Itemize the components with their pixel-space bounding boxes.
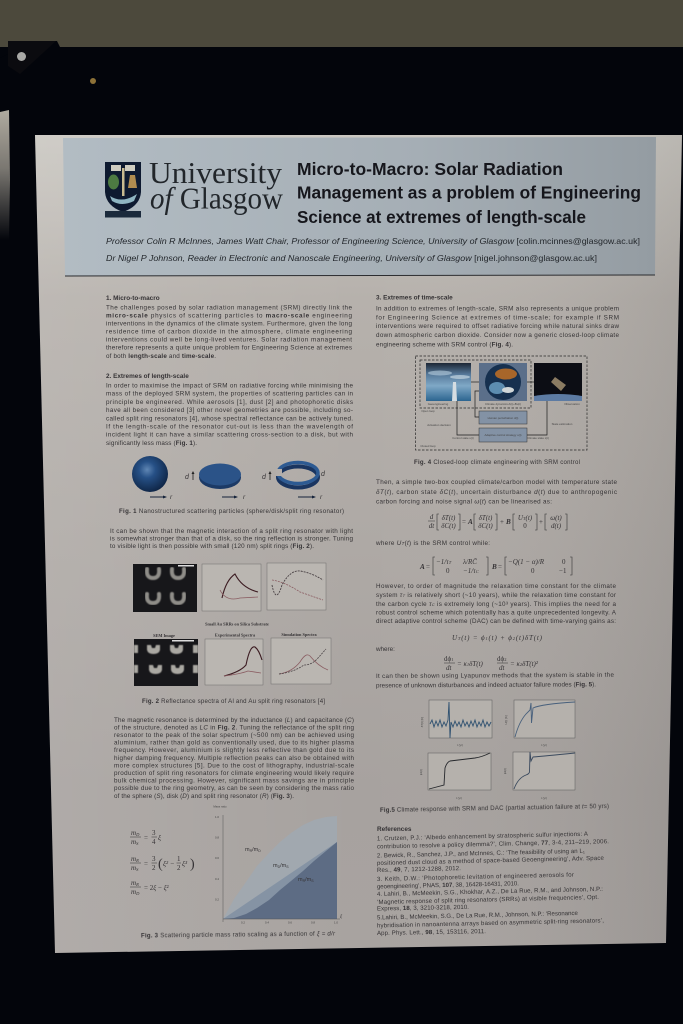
chart column headings: Experimental Spectra	[215, 632, 256, 638]
equation: linear state model: A	[467, 518, 473, 526]
area labels: m	[298, 877, 303, 883]
equation: ring to disk: m	[131, 879, 136, 887]
text: magnetic resonance: resonator to the peak of the solar spectrum (~500 nm) can be achieved using	[114, 732, 354, 739]
chart heading: substrate: Small Au SRRs on Silica Substrate	[205, 622, 269, 626]
equation: ring to sphere: S	[136, 867, 139, 872]
chart: gain two	[503, 752, 575, 800]
references: 2. Bewick, R., Sanchez, J.P., and McInnes, C.: ‘The feasibility of using an L₁	[377, 848, 585, 859]
equation: disk to sphere: m	[131, 838, 136, 846]
text: relaxation time constants: system τT is relatively short (~10 years), while the relaxation time constant for	[376, 592, 616, 599]
area labels: D	[258, 849, 261, 853]
figure 2: reflectance spectra	[133, 563, 331, 686]
equation: gain dynamics: dϕ1	[444, 655, 453, 663]
equation: disk to sphere	[130, 829, 161, 846]
equation: ring to sphere: ξ² −	[163, 860, 175, 868]
equation: ring to sphere: (	[158, 857, 163, 872]
axis ticks: 0.4	[265, 920, 269, 924]
diagram labels: Climate dynamics A(t)+Bu(t)	[485, 402, 521, 406]
references: 3. Keith, D.W.: ‘Photophoretic levitation of engineered aerosols for	[377, 872, 574, 883]
text: magnetic resonance: The magnetic resonance is determined by the inductance (L) and capacitance (C)	[114, 717, 354, 724]
equation: ring to sphere: ξ³	[182, 860, 188, 868]
chart column headings: SEM Image	[153, 633, 175, 638]
area labels: m	[245, 847, 250, 853]
text: magnetic interaction: It can be shown that the magnetic interaction of a split ring resonator with light	[110, 528, 353, 535]
text: magnetic interaction: to visible light is then possible with small (120 nm) split rings (Fig. 2).	[110, 543, 314, 550]
equation: gain dynamics	[444, 655, 539, 672]
chart: Au experimental spectra	[205, 639, 263, 685]
equation: A and B matrices: −1	[559, 567, 567, 575]
references: 1. Crutzen, P.J.: ‘Albedo enhancement by stratospheric sulfur injections: A	[377, 831, 589, 842]
area labels: D	[278, 865, 281, 869]
text: magnetic resonance: of the sphere (S), disk (D) and split ring resonator (R) (Fig. 3).	[114, 793, 294, 800]
references: Res., 49, 7, 1212-1288, 2012.	[377, 865, 461, 874]
equation: A and B matrices: =	[426, 563, 430, 571]
axis ticks: 0.8	[311, 920, 315, 924]
wall background	[0, 0, 683, 47]
chart: temperature noise: t (yr)	[457, 743, 463, 747]
area labels: /m	[280, 863, 287, 869]
text: where: where:	[375, 646, 395, 653]
section 3: extremes of time-scale: interventions were required to offset radiative forcing while natural sinks draw	[376, 323, 619, 330]
section 2: extremes of length-scale: If the length-scale of the resonator cut-out is less than the wavelength of	[106, 424, 353, 430]
authors: Professor Colin R McInnes, James Watt Chair, Professor of Engineering Science, University of Glasgow [colin.mcinnes@glasgow.ac.uk]	[106, 236, 640, 246]
mass ratio equations	[130, 829, 195, 896]
axis ticks: 0.6	[288, 920, 292, 924]
text: magnetic resonance: of the structure, denoted as LC in Fig. 2. Tuning the reflectance of the split ring	[114, 724, 354, 732]
axis ticks: Mass ratio	[213, 804, 227, 808]
text: Lyapunov stability: presence of unknown disturbances and indeed actuator failure modes (Fig. 5).	[376, 681, 596, 689]
SEM image: Al split rings	[133, 564, 197, 612]
area labels	[245, 847, 314, 883]
section 2: extremes of length-scale: called split ring resonators [4], whose spectral reflectance can be actively tuned.	[106, 416, 353, 422]
chart column headings	[153, 632, 317, 638]
diagram labels: Actuation decision	[427, 423, 451, 427]
icon: disk: d	[185, 474, 190, 481]
equation: A and B matrices: 0	[446, 567, 450, 575]
image: observation satellite	[534, 363, 582, 401]
chart: carbon response	[504, 700, 575, 747]
icon: split ring	[262, 462, 326, 501]
section 1: micro-to-macro	[106, 295, 352, 360]
equation: linear state model: δC(t)	[478, 522, 493, 530]
text: magnetic resonance: production of split ring resonators for climate engineering would likely require	[114, 770, 354, 777]
area labels: R	[250, 849, 253, 853]
chart: gain two: t (yr)	[541, 796, 547, 800]
chart: Al experimental spectra	[202, 564, 261, 611]
figure 4 caption: Fig. 4 Closed-loop climate engineering with SRM control	[414, 459, 580, 466]
SEM image: Au split rings	[134, 639, 198, 686]
arrows: feedback connections	[457, 382, 547, 435]
references: 5.Lahiri, B., McMeekin, S.G., De La Rue, R.M., Johnson, N.P.: ‘Resonance	[377, 910, 579, 921]
area: ring to sphere	[223, 842, 337, 919]
chart: gain one	[419, 753, 491, 800]
icon: disk: r	[243, 494, 246, 501]
axis ticks: 0.2	[215, 898, 219, 902]
icon: disk	[185, 464, 246, 501]
area labels: R	[303, 879, 306, 883]
box: adaptive control	[479, 428, 527, 442]
equation: A and B matrices: λ/RC̄	[462, 558, 477, 566]
icon: split ring: d	[262, 474, 267, 481]
section 1: micro-to-macro: therefore represents a quite unique problem for Engineering Science at extremes	[106, 344, 352, 352]
figure 4: closed-loop diagram	[416, 356, 587, 450]
equation: linear state model: d(t)	[551, 522, 562, 530]
equation: ring to sphere: R	[135, 858, 139, 863]
equation: disk to sphere: 4	[152, 838, 156, 846]
equation: ring to sphere: 2	[177, 864, 181, 872]
text: relaxation time constants: robust control scheme which potentially has a quite unprecedented longevity. A	[376, 610, 617, 616]
equation: ring to sphere: )	[190, 857, 195, 872]
university wordmark: of Glasgow	[150, 180, 284, 216]
text: relaxation time constants: However, to order of magnitude the relaxation time constant for the climate	[376, 583, 616, 590]
equation: gain dynamics: = κ1δT(t)	[457, 660, 484, 668]
text: magnetic resonance: frequency. However, aluminium is slightly less reflective than gold due to its	[114, 747, 354, 754]
equation: disk to sphere: =	[144, 834, 148, 842]
equation: linear state model: dt	[429, 522, 435, 530]
axis ticks: 0.6	[215, 856, 219, 860]
equation: ring to disk	[130, 879, 169, 896]
chart: carbon response: U(t) [K]	[504, 715, 508, 725]
equation: disk to sphere: S	[136, 841, 139, 846]
equation: ring to sphere: m	[131, 855, 136, 863]
equation: gain dynamics: dt	[499, 664, 506, 672]
equation: A and B matrices: −Q(1 − α)/R	[508, 558, 545, 566]
references: References	[377, 826, 412, 833]
poster title: Management as a problem of Engineering	[297, 182, 641, 202]
section 2: extremes of length-scale: In order to maximise the impact of SRM on radiative forcing while minimising the	[106, 382, 353, 390]
equation: ring to sphere: 1	[177, 855, 181, 863]
area: disk to sphere	[223, 842, 337, 919]
box: human perturbation: Human perturbation d(t)	[488, 416, 518, 420]
axis ticks: 0.4	[215, 877, 219, 881]
section 3: extremes of time-scale: down atmospheric carbon dioxide. Consider now a generic closed-loop climate	[376, 332, 619, 339]
equation: linear state model: d	[430, 513, 434, 521]
chart: temperature noise: δT(t) [K]	[420, 717, 424, 727]
chart: Au simulated spectra	[271, 638, 331, 684]
figure 1: scattering particles	[132, 456, 326, 501]
section 2: extremes of length-scale: significantly less mass (Fig. 1).	[106, 440, 197, 447]
text: two-box model	[376, 479, 617, 506]
equation: gain dynamics: dt	[446, 664, 452, 672]
equation: adaptive control law: UT(t) = ϕ1(t) + ϕ2(t)δT(t)	[452, 634, 543, 642]
equation: linear state model: 0	[523, 522, 527, 530]
closed loop boundary	[416, 356, 587, 450]
poster title: Micro-to-Macro: Solar Radiation	[297, 159, 563, 179]
area: ring to disk	[223, 816, 337, 919]
equation: disk to sphere: ξ	[158, 834, 161, 842]
equation: linear state model: UT(t)	[518, 514, 533, 522]
references: positioned dust cloud as a method of space-based Geoengineering’, Adv. Space	[377, 855, 605, 867]
equation: A and B matrices: 0	[531, 567, 535, 575]
section 3: extremes of time-scale	[376, 294, 619, 348]
axis ticks: 0.2	[241, 920, 245, 924]
text: two-box model: Then, a simple two-box coupled climate/carbon model with temperature state	[376, 479, 617, 486]
area labels: S	[286, 865, 289, 869]
text: magnetic resonance	[114, 717, 354, 800]
text: relaxation time constants: the carbon cycle τC is extremely long (~10³ years). This implies the need for a	[376, 601, 616, 608]
equation: linear state model: δT(t)	[442, 514, 456, 522]
image: earth climate dynamics	[479, 363, 527, 401]
icon: split ring: r	[320, 494, 323, 501]
text: magnetic resonance: aluminium, rather than gold as conventionally used, due to its higher plasma	[114, 740, 354, 746]
equation: gain dynamics: dϕ2	[497, 655, 506, 663]
axis ticks	[213, 804, 343, 924]
equation: linear state model: δC(t)	[441, 522, 456, 530]
references: contribution to resolve a policy dilemma?’, Clim. Change, 77, 3-4, 211–219, 2006.	[377, 838, 609, 850]
section 1: micro-to-macro: interventions could well be long-lived ventures. Solar radiation management	[106, 336, 352, 344]
equation: A and B matrices: B	[491, 563, 497, 571]
chart: gain one: ϕ1(t)	[419, 769, 423, 775]
section 2: extremes of length-scale: have all been considered [3] other novel geometries are possible, including so-	[106, 407, 353, 414]
axis ticks: 0.8	[215, 836, 219, 840]
university crest	[105, 162, 141, 218]
section 2: extremes of length-scale: mass of the deployed SRM system, the properties of scattering particles can in	[106, 390, 353, 398]
section 3: extremes of time-scale: engineering scheme with SRM control (Fig. 4).	[376, 342, 513, 348]
references: 4. Lahiri, B., McMeekin, S.G., Khokhar, A.Z., De La Rue, R.M., and Johnson, N.P.:	[377, 886, 603, 898]
references: geoengineering’, PNAS, 107, 38, 16428-16431, 2010.	[377, 880, 519, 890]
section 1: micro-to-macro: interventions in the dynamics of the climate system. Furthermore, given the long	[106, 320, 352, 328]
figure 5: climate response charts	[419, 700, 575, 800]
box: human perturbation	[479, 411, 527, 424]
equation: linear state model: =	[462, 518, 466, 526]
icon: split ring: d	[321, 471, 326, 478]
authors	[106, 236, 640, 263]
axis ticks: 1.0	[334, 920, 338, 924]
axis ticks: ξ	[340, 914, 343, 920]
diagram labels: Observation	[564, 402, 580, 406]
text: Lyapunov stability	[376, 672, 614, 690]
section 1: micro-to-macro: micro-scale physics of scattering particles to macro-scale engineering	[106, 312, 352, 320]
section 1: micro-to-macro: 1. Micro-to-macro	[106, 295, 160, 302]
pale strip at left edge	[0, 110, 10, 240]
chart column headings: Simulation Spectra	[281, 632, 317, 637]
university wordmark: University	[149, 155, 283, 190]
text: magnetic resonance: possible due to the ring geometry, as can be seen by considering the mass ratio	[114, 785, 354, 792]
diagram labels: Closed loop	[420, 444, 436, 448]
equation: ring to disk: D	[135, 891, 140, 896]
references	[377, 826, 609, 937]
text: relaxation time constants	[376, 583, 617, 625]
icon: sphere: r	[170, 494, 173, 501]
equation: linear state model: δT(t)	[479, 514, 493, 522]
references: Express, 18, 3, 3210-3218, 2010.	[377, 904, 469, 912]
equation: disk to sphere: m	[131, 829, 136, 837]
equation: A and B matrices	[419, 557, 572, 575]
section 2: extremes of length-scale: principle be engineered. While aerosols [1], dust [2] and photophoretic disks	[106, 399, 353, 406]
text: Lyapunov stability: It can then be shown using Lyapunov methods that the system is stable in the	[376, 672, 614, 680]
figure 3 caption: Fig. 3 Scattering particle mass ratio scaling as a function of ξ = d/r	[141, 930, 336, 939]
figure 2 caption: Fig. 2 Reflectance spectra of Al and Au split ring resonators [4]	[142, 698, 325, 705]
board corner bracket with screw	[8, 41, 56, 74]
equation: ring to sphere: 3	[152, 855, 156, 863]
area labels: /m	[305, 877, 312, 883]
equation: ring to disk: = 2ξ − ξ²	[144, 884, 169, 892]
poster title: Science at extremes of length-scale	[297, 207, 586, 227]
area labels: m	[273, 863, 278, 869]
text: two-box model: δT(t), carbon state δC(t), uncertain disturbance d(t) due to anthropogenic	[376, 489, 617, 496]
text: magnetic resonance: bulk chemical processing. However, significant mass savings are in principle	[114, 778, 354, 784]
equation: A and B matrices: −1/τT	[436, 558, 452, 566]
equation: A and B matrices: =	[498, 563, 502, 571]
authors: Dr Nigel P Johnson, Reader in Electronic and Nanoscale Engineering, University of Glasgow [nigel.johnson@glasgow.ac.uk]	[106, 253, 597, 263]
diagram labels: Climate state x(t)	[527, 436, 549, 440]
chart: gain one: t (yr)	[456, 796, 462, 800]
area labels: S	[311, 879, 314, 883]
chart: gain two: ϕ2(t)	[503, 768, 507, 774]
equation: linear state model: +	[539, 518, 543, 526]
board pin	[90, 78, 96, 84]
equation: disk to sphere: D	[135, 832, 140, 837]
figure 5 caption: Fig.5 Climate response with SRM and DAC (partial actuation failure at t= 50 yrs)	[380, 803, 609, 814]
image: geoengineering tower	[426, 363, 471, 401]
references: App. Phys. Lett., 98, 15, 153116, 2011.	[377, 928, 486, 937]
chart: temperature noise	[420, 700, 492, 747]
header banner	[63, 137, 656, 276]
equation: ring to sphere: 2	[152, 864, 156, 872]
diagram labels: Control state u(t)	[452, 436, 474, 440]
diagram labels: State estimation	[552, 422, 573, 426]
references: ‘Magnetic response of split ring resonators (SRRs) at visible frequencies’, Opt.	[377, 894, 599, 906]
equation: ring to sphere: m	[131, 864, 136, 872]
equation: linear state model: +	[500, 518, 504, 526]
equation: A and B matrices: A	[419, 563, 425, 571]
box: adaptive control: Adaptive control strategy u(t)	[485, 433, 522, 437]
equation: disk to sphere: 3	[152, 829, 156, 837]
text: magnetic resonance: higher damping frequency. Multiple reflection peaks can also be obtained with	[114, 755, 354, 762]
equation: linear state model: ω(t)	[550, 514, 562, 522]
chart: Al simulated spectra	[267, 563, 326, 610]
equation: gain dynamics: = κ2δT(t)²	[510, 660, 539, 668]
section 2: extremes of length-scale	[106, 373, 353, 447]
references: hybridisation in nanoantenna arrays based on asymmetric split-ring resonators’,	[377, 917, 604, 929]
text: magnetic interaction	[110, 528, 353, 550]
poster sheet	[35, 135, 682, 953]
section 3: extremes of time-scale: for Engineering Science at extremes of time-scale; for example if SRM	[376, 314, 619, 322]
area labels: /m	[252, 847, 259, 853]
text: relaxation time constants: direct adaptive control scheme (DAC) can be defined with time-varying gains as:	[376, 618, 616, 625]
section 3: extremes of time-scale: In addition to extremes of length-scale, SRM also represents a unique problem	[376, 306, 619, 312]
equation: ring to sphere: =	[144, 860, 148, 868]
icon: sphere	[132, 456, 173, 501]
axis ticks: 1.0	[215, 815, 219, 819]
figure 1 caption: Fig. 1 Nanostructured scattering particles (sphere/disk/split ring resonator)	[119, 508, 344, 515]
equation: ring to disk: m	[131, 888, 136, 896]
open loop boundary	[420, 360, 531, 408]
figure 3: mass ratio chart	[213, 804, 343, 924]
university wordmark	[149, 155, 284, 216]
section 1: micro-to-macro: residence time of carbon dioxide in the atmosphere, climate engineering	[106, 328, 352, 336]
section 1: micro-to-macro: The challenges posed by solar radiation management (SRM) directly link the	[106, 304, 352, 312]
section 3: extremes of time-scale: 3. Extremes of time-scale	[376, 294, 453, 302]
diagram labels: Open loop	[421, 409, 435, 413]
diagram labels: Geoengineering	[428, 402, 449, 406]
chart: carbon response: t (yr)	[541, 743, 547, 747]
section 2: extremes of length-scale: 2. Extremes of length-scale	[106, 373, 189, 380]
equation: linear state model	[428, 513, 567, 530]
section 1: micro-to-macro: of both length-scale and time-scale.	[106, 353, 216, 360]
text: two-box model: carbon forcing and noise signal ω(t) can be linearised as:	[376, 498, 552, 506]
section 2: extremes of length-scale: incident light it can have a similar scattering cross-section to a disk, but with	[106, 432, 353, 438]
poster title	[297, 159, 641, 227]
equation: A and B matrices: −1/τC	[463, 567, 480, 575]
diagram labels	[420, 402, 580, 448]
equation: ring to sphere	[130, 855, 195, 872]
text: SRM control: where UT(t) is the SRM control while:	[375, 540, 490, 547]
text: magnetic resonance: more complex structures [5]. Due to the cost of lithography, industrial-scale	[114, 762, 354, 770]
text: magnetic interaction: is somewhat stronger than that of a disk, so the ring reflection is stronger. Tuning	[110, 536, 353, 542]
equation: ring to disk: R	[135, 882, 139, 887]
equation: linear state model: B	[505, 518, 511, 526]
equation: A and B matrices: 0	[562, 558, 566, 566]
